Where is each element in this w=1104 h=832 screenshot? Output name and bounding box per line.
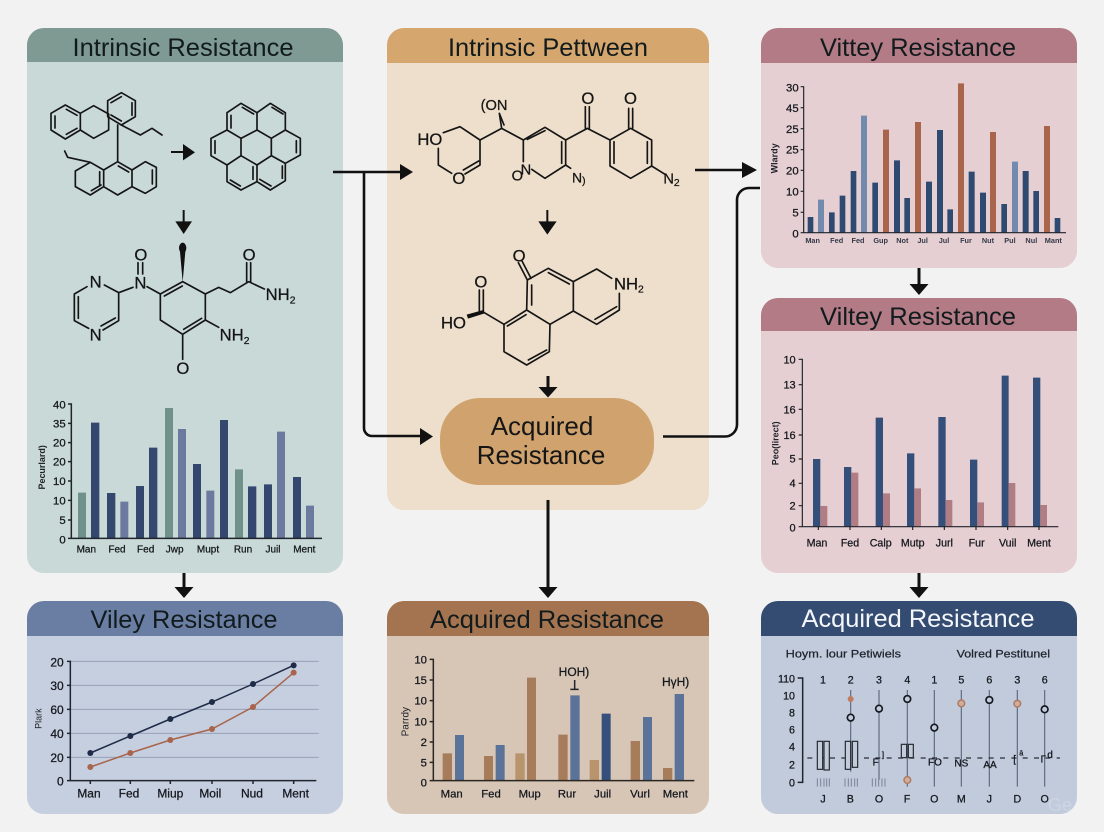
series: orange <box>87 670 297 770</box>
panel: viley resistance line chart <box>27 601 343 814</box>
molecule group: intermediate structures: O <box>474 272 487 291</box>
box plot chart: d <box>1047 750 1053 761</box>
box plot chart: 2 <box>848 674 854 686</box>
box plot chart: 5 <box>958 674 964 686</box>
bar chart: acquired: Rur <box>558 788 576 800</box>
heading: viley resistance: Viley Resistance <box>90 606 278 634</box>
bar chart: acquired <box>400 655 694 800</box>
box plot chart: 2 <box>789 759 795 771</box>
molecule group: intrinsic structures: O <box>243 246 256 265</box>
bar chart: paired: Mutp <box>901 538 925 550</box>
bar chart: acquired: HγH) <box>662 675 689 689</box>
bar chart: monthly: Fed <box>851 236 865 245</box>
molecule group: intrinsic structures: N <box>90 272 102 291</box>
molecule group: intermediate structures: N <box>521 163 531 179</box>
bar chart: paired: 10 <box>783 355 796 367</box>
box plot chart: F <box>873 757 879 768</box>
box plot chart: 1 <box>931 674 937 686</box>
molecule: tricyclic acid <box>479 261 619 365</box>
box plot chart: 3 <box>876 674 882 686</box>
bar chart: acquired: HOH) <box>559 665 589 679</box>
box plot chart: F <box>904 794 911 806</box>
heading: viltey resistance: Viltey Resistance <box>820 303 1016 331</box>
molecule: polycyclic aromatic <box>211 103 300 190</box>
molecule group: intermediate structures: HO <box>441 314 466 333</box>
icon: arrow right <box>171 144 195 160</box>
bar chart: paired: Vuil <box>999 538 1016 550</box>
bar chart: acquired: Mup <box>519 788 541 800</box>
arrow: center panel down <box>538 500 558 598</box>
box plot chart: J <box>987 794 992 806</box>
icon: arrow down <box>175 210 192 234</box>
molecule group: intrinsic structures: 2 <box>290 295 296 306</box>
line chart <box>33 656 319 801</box>
bar chart: paired: Fed <box>841 538 859 550</box>
bar chart: intrinsic resistance: Pecurlard) <box>37 445 47 490</box>
panel: vittey resistance top <box>761 28 1077 268</box>
line chart: 0 <box>57 774 64 788</box>
line chart: 20 <box>50 751 64 765</box>
box plot chart: 3 <box>1014 674 1020 686</box>
box plot chart: Γ <box>1041 754 1047 765</box>
box plot chart: O <box>1041 794 1049 806</box>
box plot chart: M <box>957 794 966 806</box>
bar chart: acquired: Vurl <box>630 788 650 800</box>
bar chart: paired: Peo(lirect) <box>770 421 780 465</box>
arrow: right top to right middle <box>910 268 928 295</box>
bar chart: acquired: Man <box>441 788 463 800</box>
capsule: acquired resistance <box>440 398 654 485</box>
arrow: left panel to center panel <box>333 164 413 180</box>
molecule group: intermediate structures: NH <box>614 274 638 293</box>
box plot chart: Hoym. lour Petiwiels <box>786 648 902 660</box>
panel: viltey resistance middle <box>761 298 1077 573</box>
box plot chart: 6 <box>789 724 795 736</box>
molecule group: intermediate structures: O <box>512 169 523 185</box>
bar chart: acquired: Ment <box>663 788 689 800</box>
box plot chart: ā <box>1019 748 1024 757</box>
icon: wedge bond <box>179 243 186 282</box>
bar chart: intrinsic resistance: 10 <box>53 495 66 507</box>
bar chart: paired: 2 <box>790 500 796 512</box>
box plot chart: O <box>930 794 938 806</box>
molecule group: intermediate structures: O <box>624 89 637 108</box>
heading: intrinsic resistance: Intrinsic Resistance <box>72 34 294 62</box>
bar chart: monthly: 45 <box>786 103 799 115</box>
molecule group: intermediate structures: O <box>513 247 526 266</box>
box plot chart: [ <box>1013 754 1016 765</box>
bar chart: acquired: 10 <box>414 655 427 667</box>
icon: wedge bond <box>467 310 485 319</box>
box plot chart: 0 <box>789 778 795 790</box>
bar chart: paired: 5 <box>790 454 796 466</box>
bar chart: monthly: Pul <box>1004 236 1016 245</box>
bar chart: monthly: 25 <box>786 145 799 157</box>
box plot chart: 4 <box>904 674 910 686</box>
bar chart: paired <box>770 355 1058 550</box>
arrow: right middle down <box>910 573 928 598</box>
bar chart: monthly: Jul <box>939 236 949 245</box>
box plot chart: 6 <box>986 674 992 686</box>
bar chart: monthly: Nul <box>1025 236 1037 245</box>
bar chart: monthly: Wlardy <box>769 143 779 173</box>
molecule group: intermediate structures <box>417 89 680 365</box>
molecule group: intrinsic structures: 2 <box>244 336 250 347</box>
panel: intrinsic pettween <box>387 28 709 510</box>
bar chart: intrinsic resistance: 10 <box>53 476 66 488</box>
bar chart: monthly: 10 <box>786 186 799 198</box>
bar chart: intrinsic resistance: Jwp <box>166 544 184 555</box>
bar chart: intrinsic resistance: Mupt <box>197 544 219 555</box>
box plot chart: ] <box>882 750 884 759</box>
box plot chart: 8 <box>789 707 795 719</box>
line chart: Miup <box>157 787 184 801</box>
connector: capsule to right panel <box>663 188 760 436</box>
bar chart: monthly: Not <box>896 236 909 245</box>
molecule group: intrinsic structures: N <box>134 273 146 292</box>
bar chart: intrinsic resistance: 5 <box>59 515 66 527</box>
bar chart: acquired: 10 <box>414 717 427 729</box>
molecule group: intrinsic structures: NH <box>266 285 290 304</box>
bar chart: intrinsic resistance <box>37 399 322 555</box>
line chart: Man <box>77 787 101 801</box>
bar chart: intrinsic resistance: 0 <box>59 534 66 546</box>
molecule group: intermediate structures: O <box>581 89 594 108</box>
molecule group: intermediate structures: 2 <box>674 178 680 189</box>
bar chart: acquired: 2 <box>421 737 427 749</box>
bar chart: monthly: 20 <box>786 165 799 177</box>
bar chart: monthly: Gup <box>873 236 889 245</box>
bar chart: intrinsic resistance: Ment <box>293 544 316 555</box>
bar chart: intrinsic resistance: Juil <box>266 544 280 555</box>
molecule group: intermediate structures: (ON <box>481 98 508 114</box>
bar chart: monthly <box>769 82 1066 245</box>
bar chart: paired: 16 <box>783 404 796 416</box>
bar chart: acquired: Fed <box>481 788 501 800</box>
bar chart: intrinsic resistance: Fed <box>137 544 154 555</box>
arrow: left panel down <box>174 573 194 598</box>
box plot chart: 110 <box>778 674 795 686</box>
bar chart: monthly: Mant <box>1045 236 1062 245</box>
line chart: Nud <box>241 787 263 801</box>
panel: acquired resistance box plot <box>761 601 1077 814</box>
box plot chart: Volred Pestitunel <box>957 648 1050 660</box>
molecule group: intrinsic structures <box>51 93 300 378</box>
bar chart: acquired: 15 <box>414 675 427 687</box>
molecule group: intrinsic structures: N <box>90 326 102 345</box>
bar chart: paired: 16 <box>783 430 796 442</box>
arrow: branch to acquired capsule <box>364 172 433 445</box>
heading: acquired resistance: Acquired Resistance <box>802 605 1034 633</box>
bar chart: monthly: Nut <box>982 236 995 245</box>
line chart: Moil <box>199 787 221 801</box>
capsule: acquired resistance: Acquired <box>491 411 593 441</box>
bar chart: paired: 13 <box>783 380 796 392</box>
bar chart: acquired: 5 <box>421 757 427 769</box>
capsule: acquired resistance: Resistance <box>477 440 605 470</box>
bar chart: intrinsic resistance: 20 <box>53 438 66 450</box>
box plot chart: 1 <box>820 674 826 686</box>
molecule: pyrazine amide <box>74 263 264 359</box>
line chart: 20 <box>50 656 64 670</box>
line chart: Ment <box>282 787 310 801</box>
bar chart: monthly: Jul <box>917 236 928 245</box>
bar chart: acquired: 0 <box>421 777 427 789</box>
heading: intrinsic pettween: Intrinsic Pettween <box>448 34 648 62</box>
watermark: Ge <box>1048 795 1072 815</box>
molecule group: intermediate structures: N <box>572 170 582 186</box>
icon: arrow to capsule <box>538 376 558 398</box>
heading: acquired resistance: Acquired Resistance <box>430 606 664 634</box>
molecule group: intrinsic structures: O <box>176 359 189 378</box>
arrow: center panel to right panel <box>695 162 757 178</box>
box plot chart: J <box>820 794 826 806</box>
bar chart: paired: Fur <box>969 538 985 550</box>
molecule: fused rings with chain <box>51 93 162 195</box>
panel: acquired resistance bars <box>387 601 709 814</box>
line chart: 30 <box>50 679 64 693</box>
bar chart: monthly: 25 <box>786 124 799 136</box>
icon: arrow down <box>538 210 557 235</box>
box plot chart: D <box>1013 794 1021 806</box>
bar chart: monthly: Fur <box>960 236 972 245</box>
box plot chart: 4 <box>789 742 795 754</box>
molecule: hetero ring amide <box>438 107 665 178</box>
bar chart: intrinsic resistance: Run <box>234 544 252 555</box>
line chart: Fed <box>119 787 139 801</box>
heading: vittey resistance: Vittey Resistance <box>820 34 1016 62</box>
bar chart: paired: 4 <box>790 478 796 490</box>
molecule group: intermediate structures: HO <box>417 130 442 149</box>
bar chart: paired: 0 <box>790 523 796 535</box>
line chart: 60 <box>50 703 64 717</box>
bar chart: intrinsic resistance: 35 <box>53 418 66 430</box>
box plot chart: FO <box>928 757 942 768</box>
molecule group: intermediate structures: N <box>663 171 674 187</box>
box plot chart: 6 <box>1042 674 1048 686</box>
bar chart: intrinsic resistance: 40 <box>53 399 66 411</box>
bar chart: acquired: Juil <box>594 788 611 800</box>
bar chart: intrinsic resistance: 20 <box>53 457 66 469</box>
bar chart: monthly: 0 <box>792 228 799 240</box>
bar chart: paired: Man <box>807 538 827 550</box>
bar chart: monthly: 5 <box>792 207 799 219</box>
line chart: 40 <box>50 727 64 741</box>
bar chart: acquired: Parrdy <box>400 707 411 736</box>
bar chart: intrinsic resistance: Man <box>77 544 96 555</box>
bar chart: intrinsic resistance: Fed <box>108 544 126 555</box>
box plot chart: AA <box>983 760 997 771</box>
box plot chart: O <box>875 794 883 806</box>
bar chart: monthly: 30 <box>786 82 799 94</box>
bar chart: paired: Calp <box>870 538 892 550</box>
box plot chart: 10 <box>783 690 795 702</box>
line chart: Plark <box>33 708 43 729</box>
molecule group: intrinsic structures: NH <box>220 326 244 345</box>
series: navy <box>87 662 297 756</box>
molecule group: intermediate structures: O <box>452 169 465 188</box>
bar chart: acquired: 10 <box>414 696 427 708</box>
bar chart: paired: Jurl <box>936 538 953 550</box>
box plot chart: B <box>847 794 854 806</box>
bar chart: paired: Ment <box>1027 538 1051 550</box>
bar chart: monthly: Fed <box>830 236 843 245</box>
molecule group: intermediate structures: ) <box>582 176 586 187</box>
panel: intrinsic resistance <box>27 28 343 573</box>
box plot chart: NS <box>954 758 969 769</box>
bar chart: monthly: Man <box>805 236 821 245</box>
molecule group: intermediate structures: 2 <box>638 285 644 296</box>
molecule group: intrinsic structures: O <box>134 246 147 265</box>
box plot chart <box>778 648 1060 806</box>
